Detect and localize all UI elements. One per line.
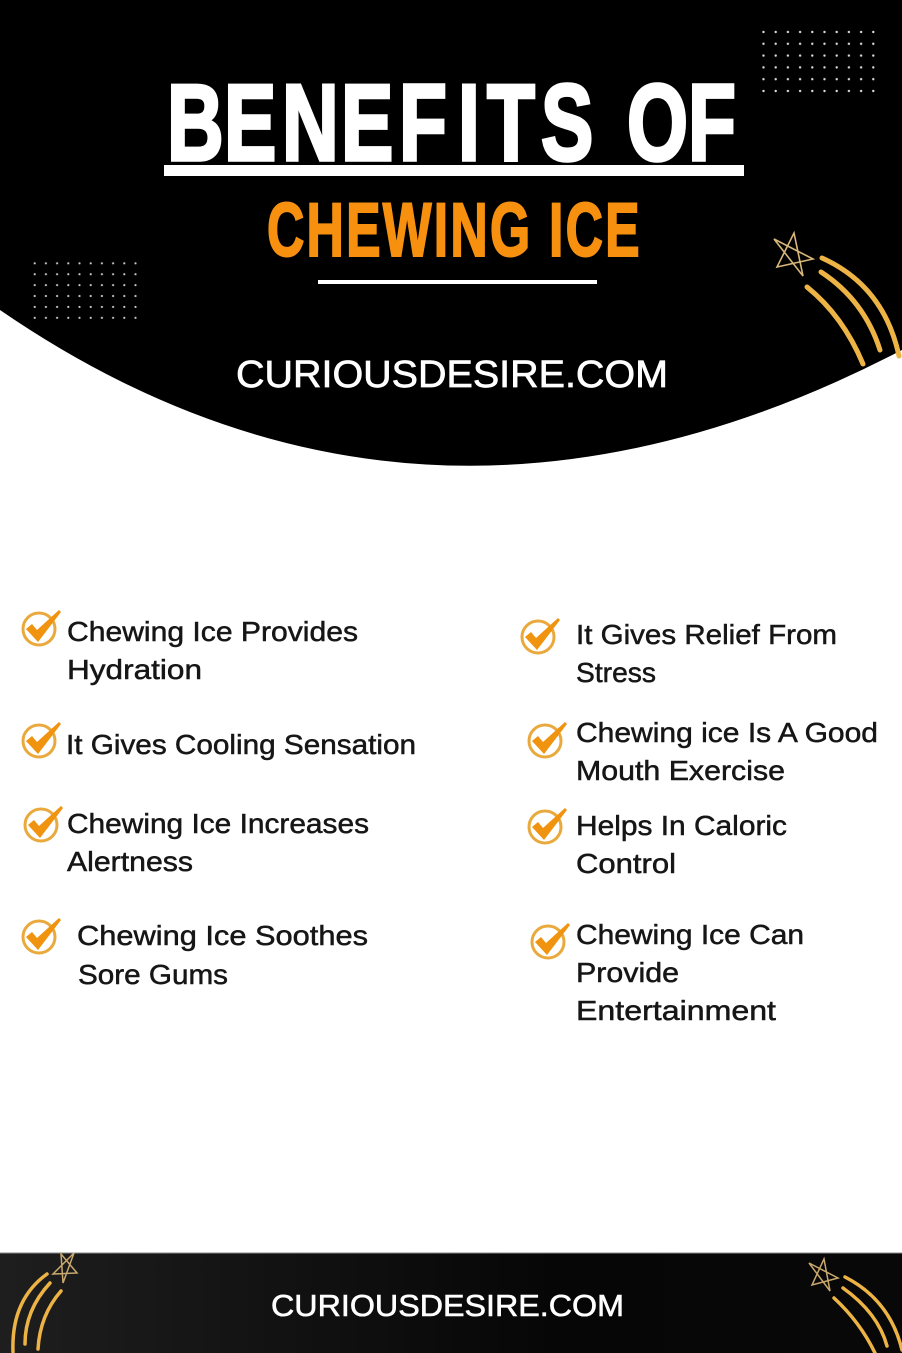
- benefit: mouth exercise: Chewing ice Is A Good: [576, 717, 878, 748]
- benefit: cooling: It Gives Cooling Sensation: [66, 729, 416, 760]
- benefit: alertness: Chewing Ice Increases: [67, 808, 369, 839]
- icon: check 3: [25, 806, 63, 841]
- website header: CURIOUSDESIRE.COM: [236, 354, 668, 396]
- benefit: gums: Sore Gums: [78, 959, 228, 990]
- header black curved panel: [0, 0, 902, 466]
- icon: check 8: [532, 923, 570, 958]
- benefit: hydration: Hydration: [67, 654, 202, 685]
- benefit: caloric control: Control: [576, 848, 676, 879]
- dot grid top right: [757, 26, 879, 97]
- subtitle: chewing ice: CHEWING ICE: [267, 187, 640, 272]
- icon: shooting star footer left: [13, 1253, 77, 1352]
- benefit: stress: Stress: [576, 657, 656, 688]
- title: benefits of: BENEFITS OF: [167, 62, 736, 184]
- icon: check 7: [529, 808, 567, 843]
- title underline: [164, 165, 744, 176]
- icon: check 1: [23, 610, 61, 645]
- benefit: mouth exercise: Mouth Exercise: [576, 755, 785, 786]
- benefit: entertainment: Chewing Ice Can: [576, 919, 804, 950]
- dot grid left: [29, 258, 141, 323]
- benefit: entertainment: Entertainment: [576, 995, 776, 1026]
- icon: shooting star top right: [774, 233, 899, 364]
- right benefits list: [522, 618, 878, 1026]
- benefit: gums: Chewing Ice Soothes: [77, 920, 368, 951]
- icon: check 4: [23, 918, 61, 953]
- benefit: stress: It Gives Relief From: [576, 619, 837, 650]
- icon: shooting star footer right: [809, 1259, 902, 1353]
- website footer: CURIOUSDESIRE.COM: [271, 1288, 624, 1323]
- subtitle rule: [318, 280, 597, 284]
- footer bar: [0, 1252, 902, 1353]
- benefit: alertness: Alertness: [67, 846, 193, 877]
- left benefits list: [23, 610, 416, 990]
- icon: check 6: [529, 722, 567, 757]
- icon: check 2: [23, 722, 61, 757]
- icon: check 5: [522, 618, 560, 653]
- benefit: caloric control: Helps In Caloric: [576, 810, 787, 841]
- benefit: hydration: Chewing Ice Provides: [67, 616, 358, 647]
- benefit: entertainment: Provide: [576, 957, 679, 988]
